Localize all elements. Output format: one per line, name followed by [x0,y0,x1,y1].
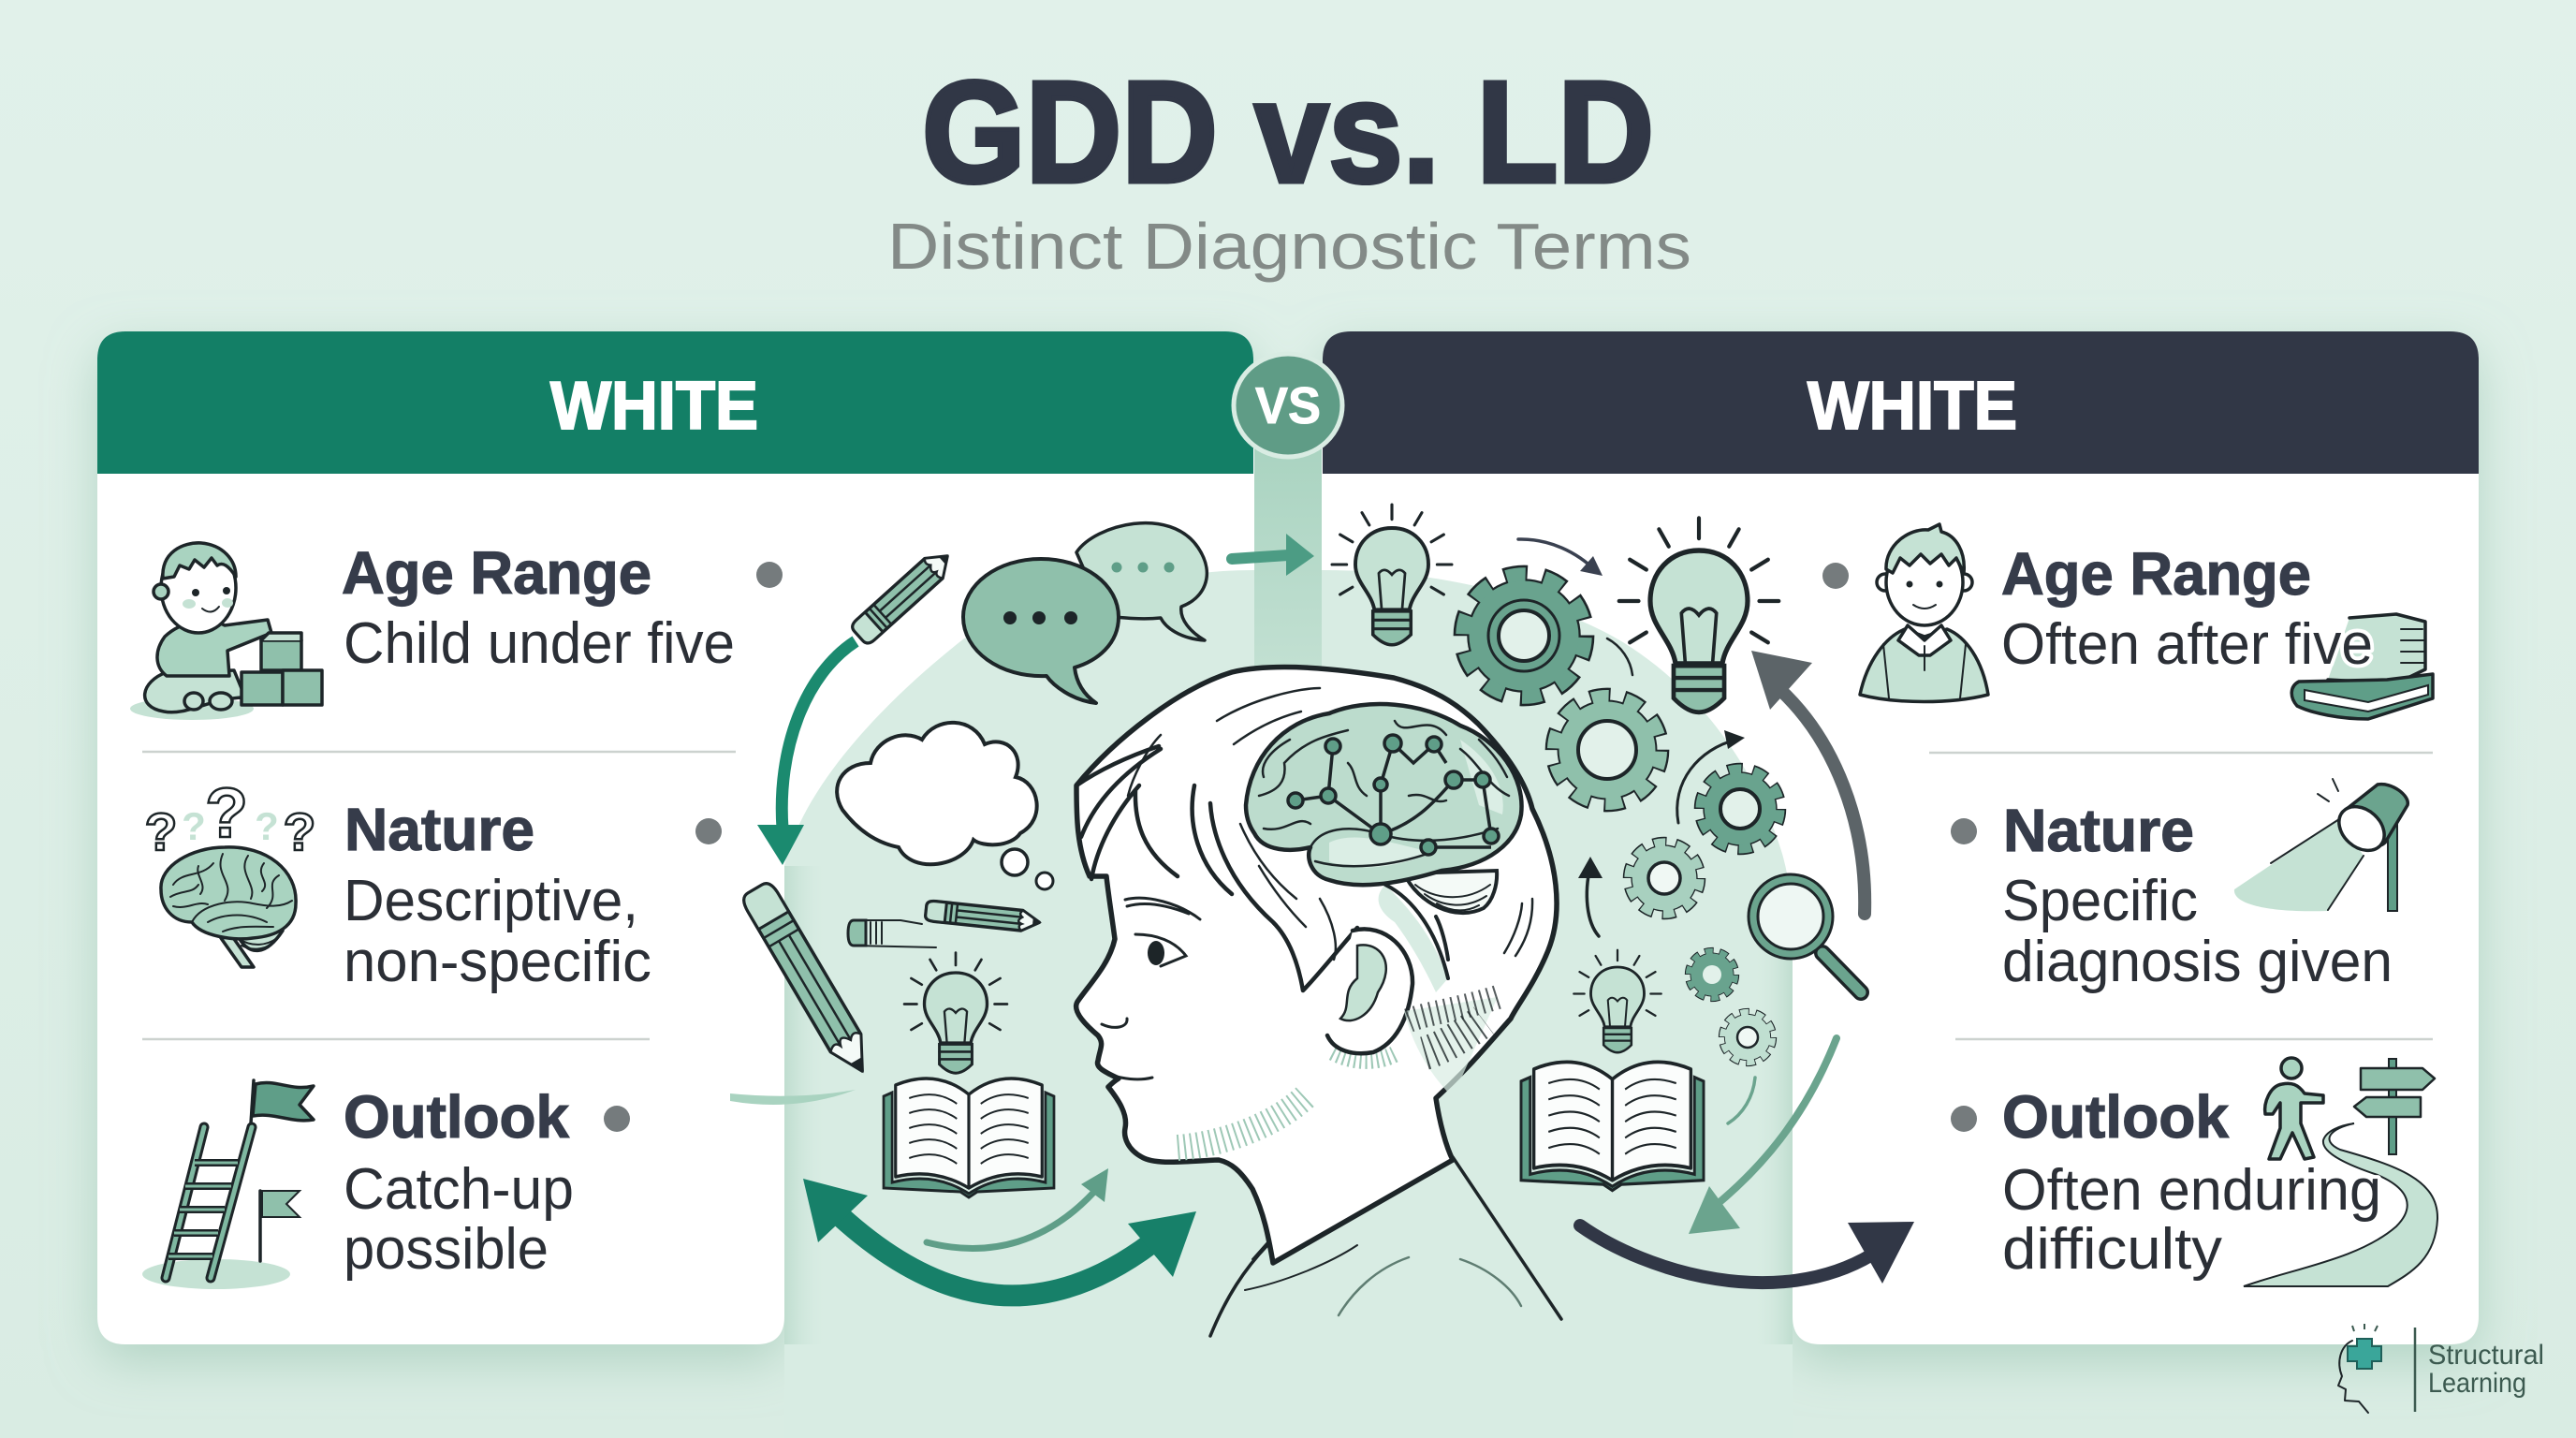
left panel content [142,539,783,1282]
panel background: white comparison card with shadow [97,331,2479,1344]
face: pupil [1148,941,1164,965]
neck hatching [1178,1095,1307,1148]
ear [1327,929,1412,1061]
title: GDD vs. LD [922,51,1654,213]
icon: brain with question marks: ? [145,802,177,862]
row: nature left: Descriptive, [344,869,638,933]
logo: Structural Learning [2338,1324,2544,1413]
row: age range right: Age Range [2001,540,2311,608]
icon: ladder with flags [142,1080,314,1289]
header: left green: WHITE [550,369,758,444]
arrow: pale green down [1689,1038,1837,1234]
header: left green [97,331,1253,474]
icon: schoolboy with backpack [1860,524,1988,702]
row: nature left: Nature [344,796,534,863]
panel edge shadow left [784,866,827,1344]
shirt fold lines [1339,1257,1521,1315]
back of neck hair [1404,997,1498,1097]
row: outlook right: Often enduring [2002,1158,2381,1223]
icon: gear 4 [1628,842,1701,915]
cerebellum [1404,871,1497,913]
row: age range right: Often after five [2001,612,2373,677]
arrows: small curved accents [1518,539,1755,1123]
row: nature right: diagnosis given [2002,930,2393,994]
icon: big pencil [739,880,877,1079]
row: outlook left: possible [344,1217,549,1282]
icon: left open book [884,1078,1054,1197]
collar shadow line [1245,1242,1357,1290]
icon: gear 3 [1700,769,1780,849]
icon: front speech bubble [963,559,1119,703]
row: nature left: non-specific [344,930,651,994]
icon: brain with question marks [145,773,315,967]
icon: large bulb [1619,518,1778,712]
icon: brain with question marks: ? [284,802,315,862]
row: age range right [1822,540,2373,677]
row: age range left: Child under five [344,611,735,676]
header: right dark: WHITE [1808,369,2017,444]
icon: stack of books [2291,614,2433,719]
arrow: green curve from pencil [757,641,856,865]
faint swoosh [730,1090,856,1105]
icon: small pencil [850,546,957,646]
right panel content [1822,540,2433,1282]
fine hair strands [1128,688,1532,960]
icon: spotlight [2234,779,2408,911]
row: nature left [142,752,736,994]
hair strands [1076,746,1357,990]
icon: brain with question marks: ? [205,773,248,852]
icon: right open book [1521,1062,1704,1191]
icon: top-left bulb right side [1332,505,1452,645]
central background dome [784,570,1793,1438]
icon: gear 1 [1462,574,1586,697]
icon: brain with question marks: ? [255,804,279,848]
central illustration [730,505,1914,1336]
row: nature right: Nature [2003,797,2194,864]
row: outlook left: Outlook [344,1083,569,1151]
panel edge shadow right [1752,899,1793,1344]
row: outlook right: Outlook [2002,1083,2229,1151]
row: outlook right [1951,1039,2433,1282]
row: outlook left: Catch-up [344,1157,574,1222]
VS badge: VS [1255,376,1321,434]
row: age range left [342,539,783,676]
arrow: grey up to bulb [1751,651,1865,914]
arrow: double-headed green [803,1179,1196,1296]
row: age range left: Age Range [342,539,651,607]
face: brow, eye, nose, mouth [1102,898,1200,1079]
row: outlook right: difficulty [2002,1217,2222,1282]
row: nature right [1929,753,2433,994]
row: outlook left [142,1039,650,1282]
arrow: dark swoop right [1580,1222,1914,1284]
centre vertical connector [1254,440,1322,669]
header: right dark [1323,331,2479,474]
icon: walker, signpost and road [2244,1058,2437,1286]
icon: gear 2 [1553,696,1661,804]
head and neck silhouette [1076,668,1557,1263]
icon: gear 5 [1688,950,1736,999]
brain stem [1379,885,1448,992]
VS badge [1234,354,1342,457]
shirt and shoulders [1210,1157,1561,1336]
icon: baby with blocks [130,543,322,720]
icon: thought cloud [837,723,1053,889]
row: nature right: Specific [2002,869,2198,933]
icon: back speech bubble [1076,523,1207,640]
arrow: thin inner [927,1168,1108,1248]
icon: speeding pencil [848,901,1040,947]
inner brain [1246,704,1522,885]
icon: gear 6 [1722,1012,1773,1063]
icon: magnifying glass [1753,879,1861,992]
arrow: right to bulb [1232,534,1314,576]
child profile head [1076,668,1561,1336]
subtitle: Distinct Diagnostic Terms [887,210,1691,283]
logo: Structural Learning: Learning [2428,1368,2526,1399]
icon: left bulb [904,953,1007,1073]
logo: Structural Learning: Structural [2428,1340,2544,1371]
icon: lower right bulb [1573,950,1661,1052]
icon: brain with question marks: ? [182,804,206,848]
